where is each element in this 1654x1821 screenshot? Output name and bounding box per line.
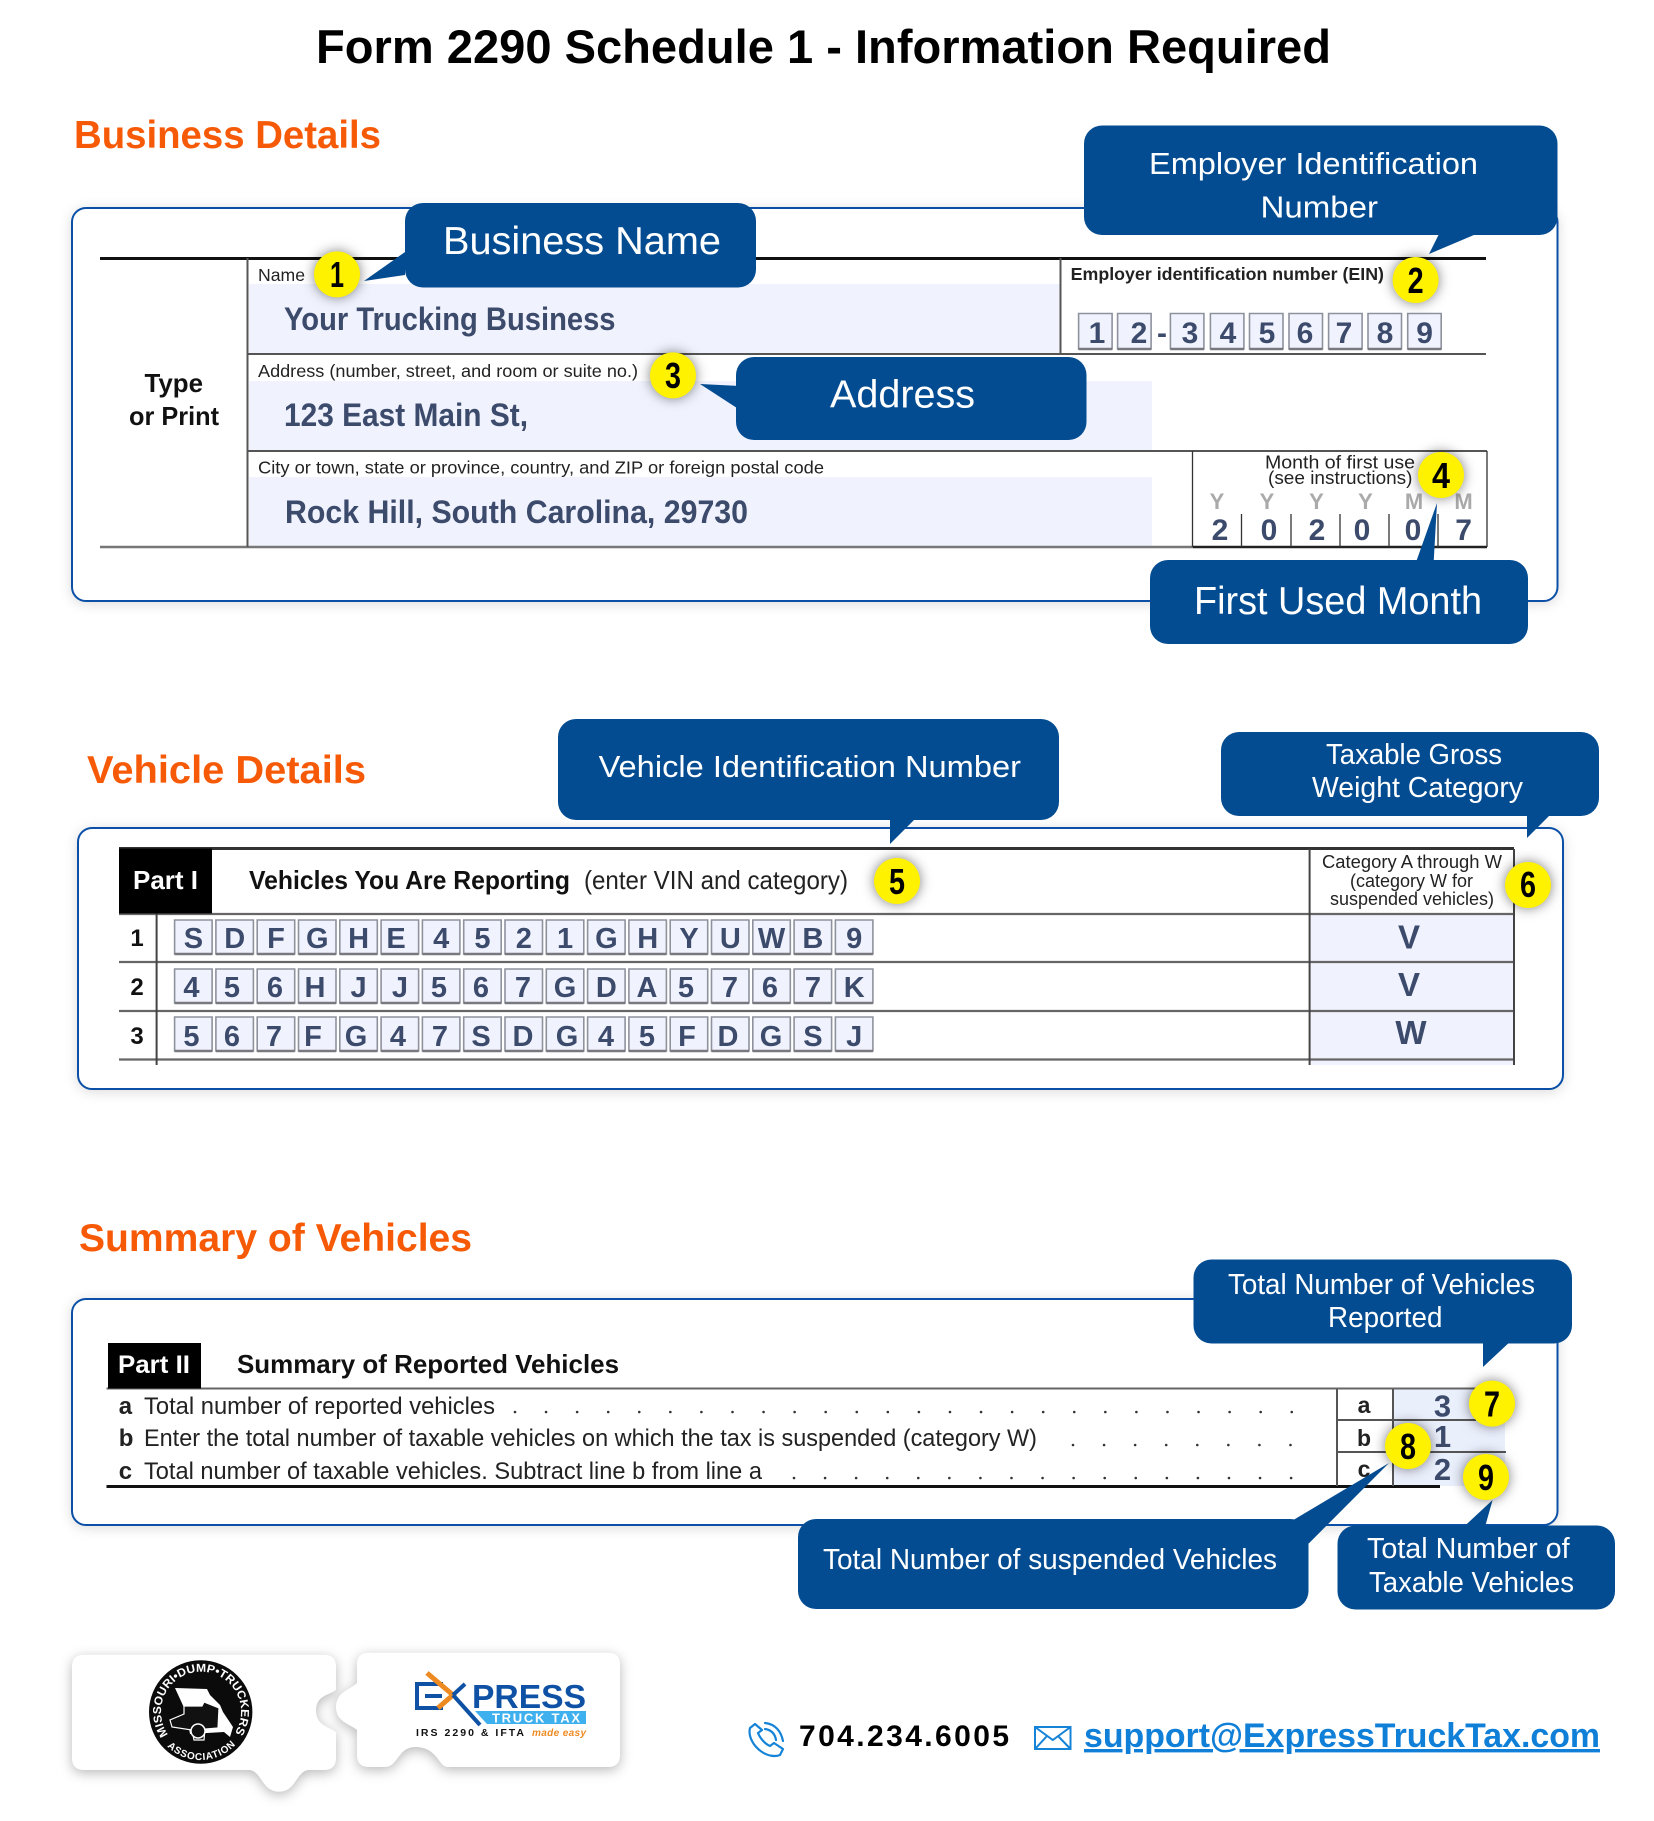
badge 4: 4 — [1432, 455, 1450, 496]
badge 9 — [1463, 1454, 1509, 1500]
badge 1: 1 — [330, 254, 344, 295]
field: month of first use: YYYYMM — [1210, 489, 1473, 514]
line c: Total number of taxable vehicles. Subtract line b from line a — [144, 1458, 763, 1485]
line values: 2 — [1434, 1452, 1451, 1487]
label: type or print: or Print — [129, 401, 219, 431]
badge 2: 2 — [1408, 260, 1424, 301]
logo: express truck tax puzzle piece: IRS 2290 & IFTA — [416, 1727, 524, 1739]
line values: 1 — [1434, 1419, 1451, 1454]
part I heading: (enter VIN and category) — [584, 865, 848, 895]
logo: express truck tax puzzle piece: PRESS — [472, 1678, 586, 1715]
line letters: a — [1358, 1392, 1371, 1418]
callout: total number of taxable vehicles: Total Number of — [1367, 1533, 1571, 1565]
badge 6 — [1505, 862, 1551, 908]
callout: vehicle identification number — [558, 719, 1059, 844]
field: month of first use: Month of first use — [1265, 452, 1415, 472]
badge 3: 3 — [665, 355, 681, 396]
badge 6: 6 — [1520, 864, 1536, 905]
badge 8: 8 — [1400, 1426, 1416, 1467]
row numbers: 2 — [130, 974, 144, 1001]
field: city: City or town, state or province, country, and ZIP or foreign postal code — [258, 458, 824, 478]
heading: summary of vehicles: Summary of Vehicles — [79, 1217, 472, 1260]
callout: total number of vehicles reported: Reported — [1328, 1302, 1442, 1334]
icon: phone — [750, 1723, 783, 1756]
line letters: b — [1357, 1425, 1371, 1451]
row numbers: 1 — [130, 925, 144, 952]
panel: summary form — [72, 1299, 1558, 1525]
field: name: Name — [258, 265, 305, 285]
category values: W — [1395, 1014, 1427, 1051]
callout: taxable gross weight category: Weight Category — [1312, 772, 1523, 804]
badge 7 — [1469, 1381, 1515, 1427]
row numbers: 3 — [130, 1023, 144, 1050]
callout: business name — [364, 203, 756, 288]
category column heading: Category A through W — [1322, 851, 1503, 872]
callout: business name: Business Name — [443, 220, 721, 263]
line values: 3 — [1434, 1389, 1451, 1424]
callout: total number of suspended vehicles: Total Number of suspended Vehicles — [823, 1544, 1277, 1576]
badge 9: 9 — [1478, 1457, 1494, 1498]
callout: total number of suspended vehicles — [798, 1463, 1389, 1609]
part I heading — [249, 865, 848, 895]
panel: business details form — [72, 208, 1558, 601]
category column heading: (category W for — [1350, 870, 1473, 891]
badge 2 — [1393, 257, 1439, 303]
logo: missouri dump truckers association puzzle piece: ASSOCIATION — [167, 1740, 235, 1760]
badge 5: 5 — [889, 861, 905, 902]
label: type or print — [129, 368, 219, 431]
callout: taxable gross weight category — [1221, 732, 1599, 838]
field: month of first use: 202007 — [1212, 514, 1472, 547]
callout: total number of taxable vehicles — [1338, 1500, 1615, 1610]
callout: total number of vehicles reported: Total Number of Vehicles — [1228, 1269, 1535, 1301]
field: name — [258, 265, 616, 337]
badge 4 — [1418, 452, 1464, 498]
callout: employer identification number: Number — [1260, 190, 1378, 225]
field: month of first use — [1210, 452, 1473, 547]
callout: address: Address — [830, 373, 975, 416]
vin row 1: SDFGHE4521GHYUWB9 — [184, 923, 862, 955]
part II heading: Summary of Reported Vehicles — [237, 1349, 619, 1379]
line a: Total number of reported vehicles — [144, 1393, 495, 1420]
callout: employer identification number: Employer Identification — [1149, 146, 1478, 181]
field: address — [258, 361, 638, 433]
part II tag — [108, 1343, 201, 1388]
line b: b — [119, 1425, 133, 1452]
line c: c — [119, 1458, 132, 1485]
heading: business details: Business Details — [74, 114, 381, 157]
logo: missouri dump truckers association puzzle piece — [65, 1651, 343, 1801]
field: address: 123 East Main St, — [284, 397, 528, 433]
field: address: Address (number, street, and room or suite no.) — [258, 361, 638, 381]
line letters: c — [1358, 1456, 1371, 1482]
heading: vehicle details: Vehicle Details — [87, 749, 366, 792]
line b: Enter the total number of taxable vehicles on which the tax is suspended (category W) — [144, 1425, 1037, 1452]
badge 7: 7 — [1484, 1384, 1500, 1425]
icon: mail — [1035, 1727, 1070, 1749]
callout: total number of taxable vehicles: Taxable Vehicles — [1369, 1567, 1574, 1599]
badge 5 — [874, 858, 920, 904]
title: Form 2290 Schedule 1 - Information Required — [316, 20, 1331, 73]
callout: total number of vehicles reported — [1194, 1260, 1572, 1367]
field: name: Your Trucking Business — [284, 301, 616, 337]
field: employer identification number: Employer identification number (EIN) — [1071, 264, 1384, 284]
category column heading: suspended vehicles) — [1330, 888, 1494, 909]
category values: V — [1398, 918, 1420, 956]
field: employer identification number — [1071, 264, 1441, 350]
field: city: Rock Hill, South Carolina, 29730 — [285, 494, 748, 530]
email link: support@ExpressTruckTax.com — [1084, 1717, 1600, 1755]
category values: V — [1398, 966, 1420, 1003]
callout: first used month: First Used Month — [1194, 580, 1482, 623]
field: month of first use: (see instructions) — [1268, 468, 1412, 488]
badge 8 — [1385, 1423, 1431, 1469]
callout: first used month — [1150, 503, 1528, 644]
field: employer identification number: 12-3456789 — [1089, 317, 1433, 350]
badge 3 — [650, 352, 696, 398]
logo: express truck tax puzzle piece: made easy — [532, 1728, 586, 1739]
part I tag — [119, 848, 212, 914]
part II tag: Part II — [118, 1351, 190, 1379]
logo: express truck tax puzzle piece — [336, 1653, 620, 1767]
callout: taxable gross weight category: Taxable Gross — [1326, 739, 1502, 771]
callout: vehicle identification number: Vehicle Identification Number — [599, 749, 1021, 784]
part I heading: Vehicles You Are Reporting — [249, 865, 570, 895]
logo: express truck tax puzzle piece: TRUCK TAX — [492, 1710, 580, 1726]
vin row 2: 456HJJ567GDA5767K — [183, 972, 865, 1004]
panel: vehicle details form — [78, 828, 1563, 1089]
callout: employer identification number — [1084, 126, 1558, 254]
logo: missouri dump truckers association puzzle piece: MISSOURI•DUMP•TRUCKERS — [153, 1664, 249, 1738]
part I tag: Part I — [133, 865, 198, 895]
vin row 3: 567FG47SDG45FDGSJ — [183, 1021, 862, 1053]
line a: a — [119, 1393, 133, 1420]
callout: address — [700, 357, 1086, 440]
phone number: 704.234.6005 — [799, 1720, 1009, 1753]
category column heading — [1322, 851, 1503, 909]
badge 1 — [314, 251, 360, 297]
label: type or print: Type — [144, 368, 203, 398]
field: city — [258, 458, 824, 530]
